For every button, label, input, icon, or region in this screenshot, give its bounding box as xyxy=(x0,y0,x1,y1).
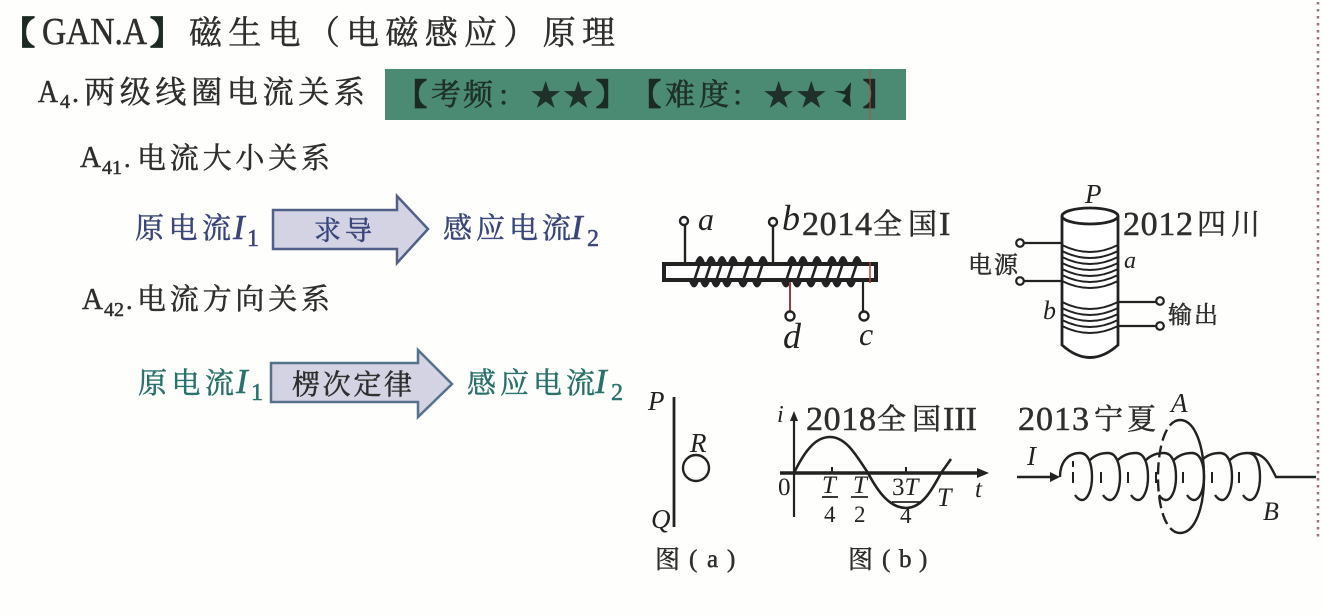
leads xyxy=(1024,243,1156,326)
chart: figure b current wave: 4 xyxy=(900,503,912,528)
caption a: a xyxy=(707,546,718,573)
diagram: 2012 cylinder with two coils: 输出 xyxy=(1168,295,1218,330)
heading: A41: 41 xyxy=(102,157,122,179)
arrow: derivative: 求导 xyxy=(314,209,372,248)
core tube xyxy=(664,264,876,280)
heading: A41: . xyxy=(124,144,130,173)
formula: current magnitude: I xyxy=(570,208,585,247)
formula: current direction: I xyxy=(235,362,250,401)
chart: figure b current wave: i xyxy=(777,402,784,428)
solenoid xyxy=(1060,453,1316,500)
badge: exam frequency and difficulty: 考频 xyxy=(431,70,494,114)
diagram: 2013 solenoid and ring xyxy=(1017,388,1316,533)
chart: figure b current wave: t xyxy=(975,476,983,503)
heading: A41: 电流大小关系 xyxy=(137,136,330,177)
label: 2014 xyxy=(802,206,872,243)
label: III xyxy=(943,401,977,438)
formula: current direction: I xyxy=(594,362,609,401)
formula: current direction: 感应电流 xyxy=(467,361,595,402)
chart: figure b current wave: 2 xyxy=(854,502,866,527)
badge: exam frequency and difficulty: ★★ xyxy=(530,76,594,116)
formula: current magnitude: 2 xyxy=(587,226,599,252)
diagram: figure a wire and ring: R xyxy=(689,428,707,458)
secondary coil xyxy=(1062,302,1118,333)
badge: exam frequency and difficulty: ★★ xyxy=(763,76,827,116)
badge: exam frequency and difficulty: 】 xyxy=(596,70,626,114)
formula: current direction: 原电流 xyxy=(138,361,234,402)
heading: A42: A xyxy=(82,281,104,316)
heading: A42: 电流方向关系 xyxy=(137,277,330,318)
caption a: 图 xyxy=(655,540,680,576)
caption b xyxy=(848,540,927,576)
label: 四川 xyxy=(1197,202,1260,243)
chart: figure b current wave xyxy=(777,397,989,576)
chart: figure b current wave: 0 xyxy=(778,474,790,501)
badge: exam frequency and difficulty: : xyxy=(499,73,508,113)
arrow: derivative xyxy=(273,196,428,263)
arrow: Lenz law: 楞次定律 xyxy=(292,363,412,403)
primary coil xyxy=(1062,245,1118,288)
chart: figure b current wave: T xyxy=(853,472,869,499)
diagram: 2012 cylinder with two coils xyxy=(968,179,1260,358)
caption a: ( xyxy=(689,546,697,573)
caption b: ( xyxy=(882,546,890,573)
diagram: 2012 cylinder with two coils: a xyxy=(1124,248,1136,274)
half star xyxy=(834,82,851,107)
label xyxy=(1123,202,1260,243)
formula: current direction: 2 xyxy=(611,380,623,406)
title: 】 xyxy=(150,8,182,54)
diagram: 2012 cylinder with two coils: P xyxy=(1084,179,1102,209)
diagram: 2012 cylinder with two coils: 电源 xyxy=(968,245,1019,280)
label xyxy=(802,202,950,243)
badge: exam frequency and difficulty: 】 xyxy=(863,70,893,114)
badge: exam frequency and difficulty: : xyxy=(733,73,742,113)
chart: figure b current wave: 3T xyxy=(892,474,920,501)
formula: current direction: 1 xyxy=(251,380,263,406)
formula: current magnitude xyxy=(135,196,599,263)
badge: exam frequency and difficulty: 【 xyxy=(397,70,427,114)
caption a xyxy=(655,540,735,576)
label: 2018 xyxy=(806,401,876,438)
windings xyxy=(694,263,857,281)
heading: A4: 4 xyxy=(60,91,70,113)
diagram: 2014 coil on core: a xyxy=(698,201,714,237)
heading: A41: A xyxy=(80,139,102,174)
formula: current magnitude: 感应电流 xyxy=(443,206,571,247)
label xyxy=(806,397,977,438)
label xyxy=(1018,397,1156,438)
caption b: 图 xyxy=(848,540,873,576)
heading: A42: . xyxy=(126,286,132,315)
diagram: 2014 coil on core xyxy=(664,198,950,356)
title xyxy=(3,7,615,54)
diagram: figure a wire and ring: P xyxy=(647,386,664,416)
chart: figure b current wave: T xyxy=(822,472,838,499)
diagram: 2014 coil on core: d xyxy=(783,316,802,356)
arrow: Lenz law xyxy=(271,350,452,417)
chart: figure b current wave: 4 xyxy=(824,502,836,527)
title: 【 xyxy=(3,8,35,54)
badge: exam frequency and difficulty: 【 xyxy=(631,70,661,114)
formula: current magnitude: 原电流 xyxy=(135,206,231,247)
diagram: 2013 solenoid and ring: I xyxy=(1026,441,1038,471)
diagram: 2013 solenoid and ring: B xyxy=(1263,497,1279,526)
diagram: 2014 coil on core: b xyxy=(782,198,800,238)
diagram: figure a wire and ring xyxy=(647,386,735,576)
label: 全国 xyxy=(877,397,941,438)
title: GAN.A xyxy=(42,11,147,53)
formula: current magnitude: 1 xyxy=(247,226,259,252)
label: 2013 xyxy=(1018,401,1089,438)
current arrow xyxy=(1017,476,1052,478)
heading: A4: 两级线圈电流关系 xyxy=(84,67,365,112)
caption a: ) xyxy=(727,546,735,573)
hidden winding dashes xyxy=(1073,461,1239,483)
badge: exam frequency and difficulty: 难度 xyxy=(665,70,729,114)
diagram: figure a wire and ring: Q xyxy=(651,504,670,534)
diagram: 2013 solenoid and ring: A xyxy=(1169,388,1188,418)
formula: current magnitude: I xyxy=(232,208,247,247)
ring A xyxy=(1180,420,1204,533)
title: 磁生电（电磁感应）原理 xyxy=(189,7,615,54)
label: 宁夏 xyxy=(1094,397,1156,438)
diagram: 2012 cylinder with two coils: b xyxy=(1043,296,1056,325)
heading: A4: . xyxy=(72,78,79,109)
heading: A4: A xyxy=(38,73,58,109)
label: 2012 xyxy=(1123,206,1193,243)
caption b: ) xyxy=(919,546,927,573)
badge: exam frequency and difficulty xyxy=(385,69,906,120)
heading: A42: 42 xyxy=(104,299,124,321)
terminals xyxy=(685,225,773,263)
label: I xyxy=(939,206,950,243)
caption b: b xyxy=(899,546,912,573)
chart: figure b current wave: T xyxy=(937,483,953,512)
diagram: 2014 coil on core: c xyxy=(859,316,873,352)
label: 全国 xyxy=(873,202,937,243)
formula: current direction xyxy=(138,350,623,417)
